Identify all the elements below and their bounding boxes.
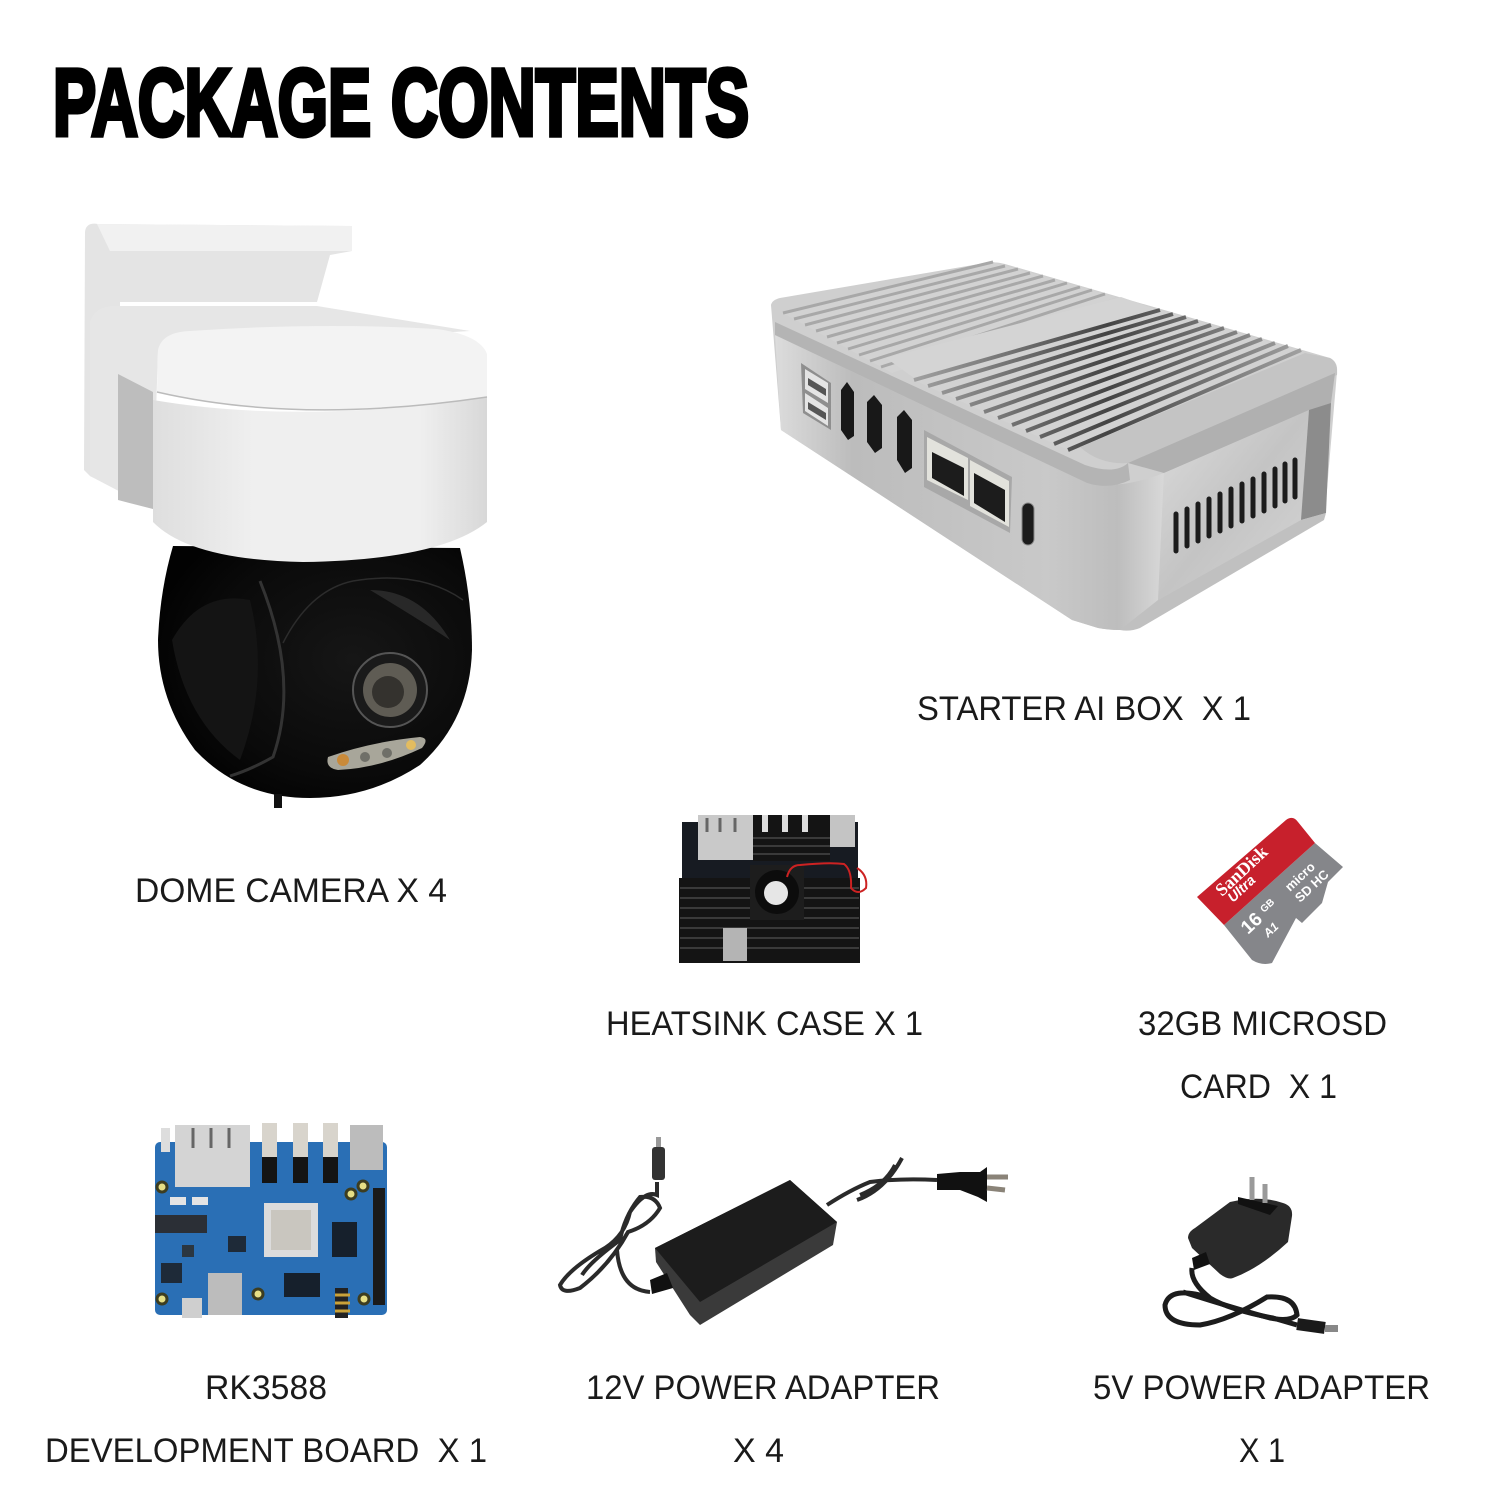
right panel [1128,373,1335,473]
front face [775,335,1164,630]
top fins right [914,310,1301,450]
icon: 12V power adapter [560,1137,1008,1325]
label: 12V power adapter: 12V POWER ADAPTER [586,1369,940,1407]
icon: heatsink case [679,815,866,963]
top flat strip [886,297,1158,378]
label: microSD card [1138,1005,1387,1106]
label: microSD card: CARD X 1 [1180,1068,1337,1106]
label: 5V power adapter: 5V POWER ADAPTER [1093,1369,1430,1407]
label: 12V power adapter: X 4 [733,1432,784,1470]
icon: microSD card: Ultra [1224,872,1259,905]
icon: microSD card: micro [1282,859,1318,894]
label: RK3588 development board: RK3588 [205,1369,327,1407]
icon: microSD card [1197,818,1343,964]
icon: microSD card: SanDisk [1211,842,1272,900]
label: RK3588 development board [45,1369,487,1470]
label: microSD card: 32GB MICROSD [1138,1005,1387,1043]
ports [801,363,831,430]
label: 12V power adapter [586,1369,940,1470]
icon: microSD card: GB [1259,897,1277,915]
label: dome camera: DOME CAMERA X 4 [135,872,447,910]
title: PACKAGE [53,50,371,156]
icon: dome camera [84,224,487,808]
icon: microSD card: SD HC [1292,866,1332,905]
top fins left [783,262,1117,373]
icon: starter AI box [771,262,1337,631]
title: CONTENTS [391,50,749,156]
icon: RK3588 development board [155,1123,387,1318]
top flat right [1080,353,1337,463]
label: RK3588 development board: DEVELOPMENT BOARD X 1 [45,1432,487,1470]
label: heatsink case: HEATSINK CASE X 1 [606,1005,923,1043]
icon: microSD card: A1 [1260,919,1282,941]
icon: microSD card: 16 [1237,909,1267,939]
label: 5V power adapter [1093,1369,1430,1470]
label: 5V power adapter: X 1 [1239,1432,1285,1470]
title [53,50,749,156]
label: starter AI box: STARTER AI BOX X 1 [917,690,1251,728]
icon: 5V power adapter [1165,1177,1338,1334]
